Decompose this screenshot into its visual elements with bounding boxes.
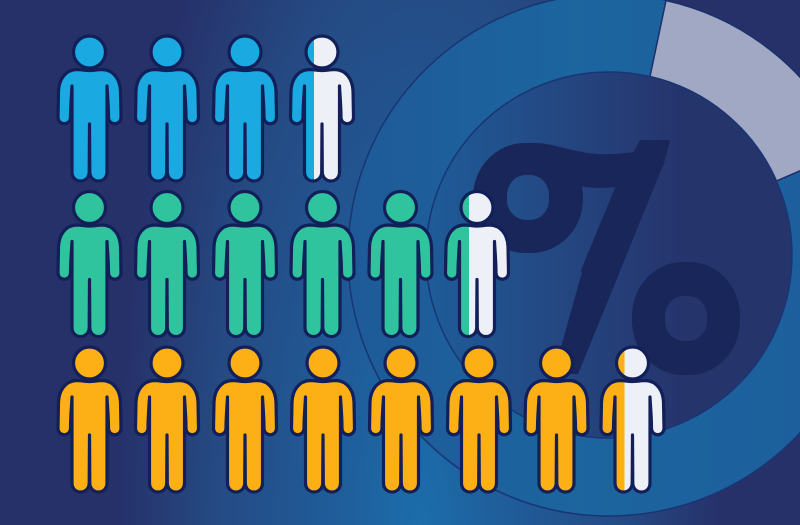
percent symbol [474,140,740,375]
person 1 [58,347,121,492]
percent top swash [528,143,665,190]
person 3 [214,347,276,492]
percent text: % [467,89,759,441]
person 3 [214,36,276,181]
person 4 [291,192,354,336]
lower ring of the percent sign [632,262,740,375]
person 4 [292,347,354,492]
donut chart [348,0,800,516]
upper ring of the percent sign [473,143,583,253]
outer ring [348,0,800,516]
person 8: partly filled [601,347,664,492]
people row: green, 5.5 of 6 [58,192,508,336]
person 2 [136,192,198,336]
people row: yellow, 7.5 of 8 [58,347,664,492]
person 3 [214,192,276,336]
person 5 [369,192,432,336]
person 4: partly filled [290,36,354,181]
people row: blue, 3.5 of 4 [58,36,354,181]
lower ring opening [665,296,707,341]
highlighted ring segment [650,0,800,181]
person 2 [136,347,198,492]
person 6 [448,347,510,492]
upper ring opening [507,175,549,220]
person 1 [58,192,121,336]
person 6: partly filled [446,192,508,336]
inner circle [426,72,792,438]
person 5 [370,347,432,492]
person 1 [58,36,121,181]
person 2 [136,36,198,181]
person 7 [525,347,588,492]
